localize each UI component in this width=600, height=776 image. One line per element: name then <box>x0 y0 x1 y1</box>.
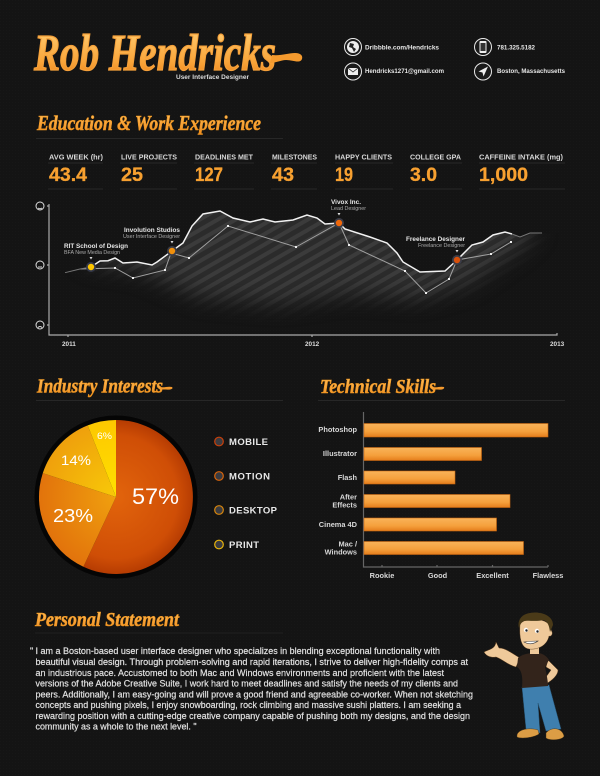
bar chart: technical skills: Windows <box>325 548 357 556</box>
personal statement text: versions of the Adobe Creative Suite, I work hard to meet deadlines and satisfy the needs of my clients and <box>36 678 458 688</box>
arm: on hip <box>536 660 558 685</box>
title: Rob Hendricks: Rob Hendricks <box>33 25 276 82</box>
stats row: 127 <box>195 165 223 186</box>
contact: email: Hendricks1271@gmail.com <box>365 68 444 75</box>
pie legend: PRINT <box>229 540 259 551</box>
stats row: DEADLINES MET <box>195 152 253 162</box>
white line <box>91 211 512 272</box>
pie chart: 6% <box>97 431 112 441</box>
pie chart: 14% <box>61 452 91 468</box>
heading: personal statement: Personal Statement <box>34 609 180 631</box>
shirt <box>517 653 549 688</box>
contact: location <box>474 63 565 80</box>
stats row: 1,000 <box>479 165 528 186</box>
arm: pointing <box>484 642 520 667</box>
stats row: HAPPY CLIENTS <box>335 152 392 162</box>
icon: smileys <box>36 202 44 329</box>
bar chart: technical skills: Excellent <box>476 571 509 580</box>
neck <box>530 645 539 654</box>
contact: location: Boston, Massachusetts <box>497 68 565 75</box>
personal statement text: rewarding position with a cutting-edge creative company capable of pushing both my designs, and the design <box>36 711 470 721</box>
marker: Freelance: Freelance Designer <box>418 243 465 249</box>
bar chart: technical skills: Photoshop <box>318 425 357 434</box>
gray line points <box>114 225 512 294</box>
pie chart <box>34 416 198 578</box>
bar chart: technical skills: After <box>340 492 357 502</box>
marker: Involution: Involution Studios <box>124 227 181 234</box>
pie legend: DESKTOP <box>229 506 278 516</box>
heading: industry interests: Industry Interests <box>36 376 163 398</box>
stats row: MILESTONES <box>272 152 317 162</box>
marker: RIT <box>64 243 128 272</box>
marker: Involution <box>123 227 181 256</box>
marker: Freelance: Freelance Designer <box>406 236 466 243</box>
stats row: COLLEGE GPA <box>410 152 462 162</box>
personal statement text: an industrious pace. Accustomed to both Mac and Windows environments and proficient with the latest <box>36 668 445 678</box>
stats row: AVG WEEK (hr) <box>49 152 104 162</box>
contact: website: Dribbble.com/Hendricks <box>365 44 439 52</box>
pie chart: 57% <box>132 484 179 509</box>
heading: technical skills: Technical Skills <box>320 376 436 398</box>
pie legend <box>215 437 278 551</box>
marker: Vivox: Lead Designer <box>331 206 366 212</box>
bar chart: technical skills: Mac / <box>339 540 357 548</box>
jeans <box>522 685 561 733</box>
bar chart: technical skills <box>318 412 563 580</box>
marker: RIT: BFA New Media Design <box>64 250 120 256</box>
pie legend: MOBILE <box>229 437 268 448</box>
marker: Involution: User Interface Designer <box>123 234 180 240</box>
bar chart: technical skills: Rookie <box>370 571 394 580</box>
gray line <box>80 223 511 293</box>
stats row <box>48 152 565 189</box>
personal statement text: concepts and pushing pixels, I enjoy snowboarding, rock climbing and massive sushi platters. I am seeking a <box>36 700 461 710</box>
chart axes <box>47 204 557 337</box>
stats row: 19 <box>335 165 353 186</box>
bar chart: technical skills: Illustrator <box>323 449 357 458</box>
marker: Vivox <box>331 199 366 228</box>
bar chart: technical skills: Flash <box>338 473 357 482</box>
bar chart: technical skills: Good <box>428 571 448 580</box>
stats row: 43.4 <box>49 165 87 186</box>
contact: phone <box>474 38 535 56</box>
face <box>524 628 539 644</box>
bar chart: technical skills: Effects <box>332 500 357 510</box>
axis years: 2013 <box>550 341 565 348</box>
axis years: 2011 <box>62 341 76 348</box>
personal statement text: peers. Additionally, I am easy-going and will prove a good friend and agreeable co-worker. When not sketching <box>36 690 473 700</box>
title: Rob Hendricks: User Interface Designer <box>176 74 249 81</box>
axis years: 2012 <box>305 341 320 348</box>
stats row: 25 <box>121 165 143 186</box>
axis years <box>62 341 565 348</box>
stats row: 43 <box>272 165 294 186</box>
contact: email <box>344 63 444 80</box>
contact: phone: 781.325.5182 <box>497 44 535 52</box>
marker: Freelance <box>406 236 466 265</box>
personal statement text: I am a Boston-based user interface designer who specializes in blending exceptional functionality with <box>36 646 440 656</box>
stats row: LIVE PROJECTS <box>121 152 177 162</box>
hair <box>519 612 553 632</box>
stats row: 3.0 <box>410 165 437 186</box>
head <box>520 619 552 649</box>
chart area fill <box>95 212 538 312</box>
marker: Vivox: Vivox Inc. <box>331 199 361 206</box>
bar chart: technical skills: Flawless <box>533 571 563 580</box>
stats row: CAFFEINE INTAKE (mg) <box>479 152 564 162</box>
personal statement text: community as a whole to the next level. " <box>36 722 196 732</box>
personal statement text: " <box>30 646 33 656</box>
personal statement text: beautiful visual design. Through problem-solving and rapid iterations, I strive to deliver high-fidelity comps at <box>36 657 469 667</box>
line fade ends <box>65 233 542 273</box>
personal statement text <box>30 646 473 732</box>
line chart: career timeline <box>36 199 565 348</box>
marker: RIT: RIT School of Design <box>64 243 128 250</box>
pie chart: 23% <box>53 506 93 526</box>
illustration: cartoon character <box>484 612 564 740</box>
heading: education and work experience: Education & Work Experience <box>36 111 261 135</box>
pie legend: MOTION <box>229 472 270 482</box>
bar chart: technical skills: Cinema 4D <box>319 520 358 529</box>
contact: website <box>344 38 439 56</box>
shoes <box>517 729 539 738</box>
